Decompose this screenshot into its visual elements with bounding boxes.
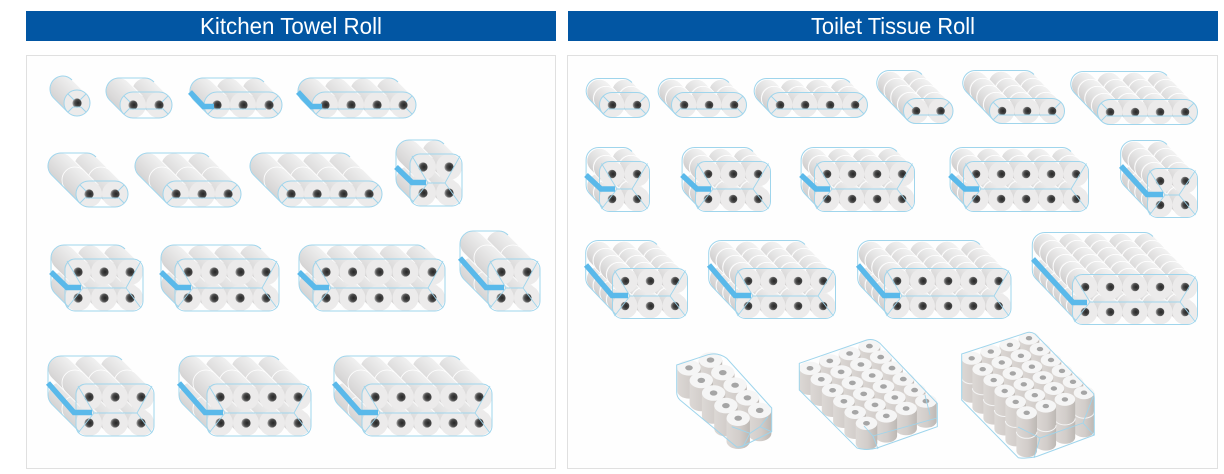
- kitchen pack: 3x2 short rolls with strap: [51, 245, 143, 311]
- kitchen pack: 3 long rolls: [135, 153, 241, 207]
- all wrapped roll packs: [48, 70, 1198, 458]
- toilet pack: 5x2, depth 4: [858, 240, 1011, 318]
- toilet pack: 3x2, depth 2: [682, 148, 770, 212]
- toilet pack: 2x2, depth 2: [586, 148, 650, 212]
- toilet pack: 4x2, depth 4: [709, 240, 836, 318]
- heading: Toilet Tissue Roll: [568, 11, 1218, 41]
- panel: kitchen towel roll packs: [26, 56, 556, 468]
- toilet pack: 4 rolls, depth 4: [1071, 72, 1198, 124]
- kitchen pack: 4x2 short rolls with strap: [161, 245, 279, 311]
- toilet pack: 2 rolls, depth 4: [877, 70, 953, 124]
- heading: Kitchen Towel Roll: Kitchen Towel Roll: [200, 13, 382, 39]
- heading: Toilet Tissue Roll: Toilet Tissue Roll: [811, 13, 975, 39]
- panel: toilet tissue roll packs: [568, 56, 1218, 468]
- toilet pack: 3 rolls, depth 4: [963, 70, 1064, 124]
- kitchen pack: 4x2 long rolls with strap: [179, 356, 311, 436]
- kitchen pack: 4 long rolls: [250, 153, 382, 207]
- heading: Kitchen Towel Roll: [26, 11, 556, 41]
- toilet pack: 3x2, depth 4: [586, 240, 688, 318]
- toilet pack: 2 rolls, depth 2: [586, 78, 650, 118]
- kitchen pack: 3 rolls with strap: [190, 78, 282, 118]
- kitchen pack: 2x2 long rolls with strap: [460, 231, 540, 311]
- toilet pack: 3 rolls, depth 2: [658, 78, 746, 118]
- kitchen pack: 3x2 long rolls with strap: [48, 356, 154, 436]
- kitchen pack: 2 long rolls: [48, 153, 128, 207]
- kitchen pack: 5x2 short rolls with strap: [299, 245, 445, 311]
- toilet pack: 4x2, depth 2: [801, 148, 914, 212]
- toilet pack: standing 2x5: [677, 352, 772, 449]
- toilet pack: standing 4x6, double height: [961, 332, 1094, 458]
- kitchen pack: 5x2 long rolls with strap: [334, 356, 492, 436]
- kitchen pack: 2x2 short rolls with strap: [396, 140, 462, 206]
- toilet pack: 4 rolls, depth 2: [754, 78, 868, 118]
- kitchen pack: single roll: [50, 76, 90, 116]
- toilet pack: standing 4x6: [799, 339, 937, 450]
- toilet pack: 2x2, depth 4: [1121, 140, 1198, 218]
- toilet pack: 5x2, depth 6: [1032, 232, 1198, 324]
- kitchen pack: 2 rolls: [106, 78, 172, 118]
- toilet pack: 5x2, depth 2: [950, 148, 1088, 212]
- kitchen pack: 4 rolls with strap: [298, 78, 416, 118]
